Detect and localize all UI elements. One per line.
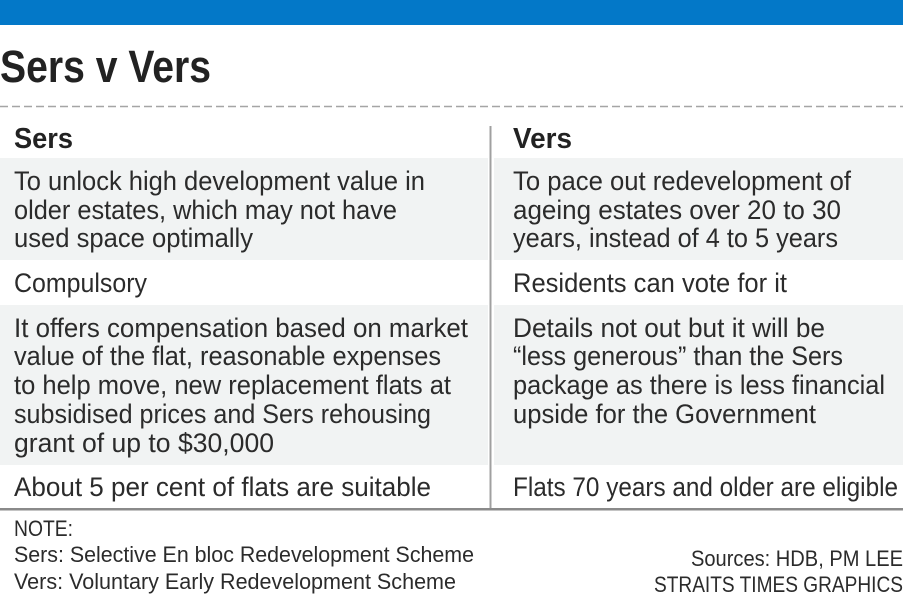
- Sers compensation: It offers compensation based on market: [14, 313, 469, 343]
- Sers compensation: value of the flat, reasonable expenses: [14, 341, 441, 371]
- title: Sers v Vers: [0, 41, 211, 92]
- note: NOTE:: [14, 516, 73, 541]
- column heading: Vers: Vers: [513, 123, 572, 155]
- Vers purpose: [513, 166, 852, 253]
- Sers compensation: to help move, new replacement flats at: [14, 370, 452, 400]
- Vers purpose: years, instead of 4 to 5 years: [513, 223, 838, 253]
- Sers purpose: older estates, which may not have: [14, 195, 397, 225]
- column: Sers: [14, 123, 469, 502]
- Sers purpose: To unlock high development value in: [14, 166, 425, 196]
- Sers purpose: used space optimally: [14, 223, 254, 253]
- note: [14, 516, 474, 594]
- Sers compensation: subsidised prices and Sers rehousing: [14, 399, 431, 429]
- column heading: Sers: Sers: [14, 123, 73, 155]
- Vers compensation: upside for the Government: [513, 399, 817, 429]
- row background: package: [0, 305, 903, 465]
- Vers purpose: ageing estates over 20 to 30: [513, 195, 841, 225]
- note: Vers: Voluntary Early Redevelopment Scheme: [14, 569, 456, 594]
- Vers purpose: To pace out redevelopment of: [513, 166, 852, 196]
- column: Vers: [513, 123, 898, 502]
- Sers compensation: [14, 313, 469, 458]
- Sers compensation: grant of up to $30,000: [14, 428, 274, 458]
- Vers compensation: Details not out but it will be: [513, 313, 825, 343]
- row background: purpose: [0, 158, 903, 260]
- Vers participation: Residents can vote for it: [513, 268, 788, 298]
- Vers compensation: “less generous” than the Sers: [513, 341, 843, 371]
- sources: [654, 546, 903, 595]
- Vers compensation: [513, 313, 885, 429]
- top blue banner: [0, 0, 903, 25]
- Sers eligibility: About 5 per cent of flats are suitable: [14, 472, 431, 502]
- Sers participation: Compulsory: [14, 268, 148, 298]
- note: Sers: Selective En bloc Redevelopment Scheme: [14, 542, 474, 567]
- Vers compensation: package as there is less financial: [513, 370, 885, 400]
- Sers purpose: [14, 166, 425, 253]
